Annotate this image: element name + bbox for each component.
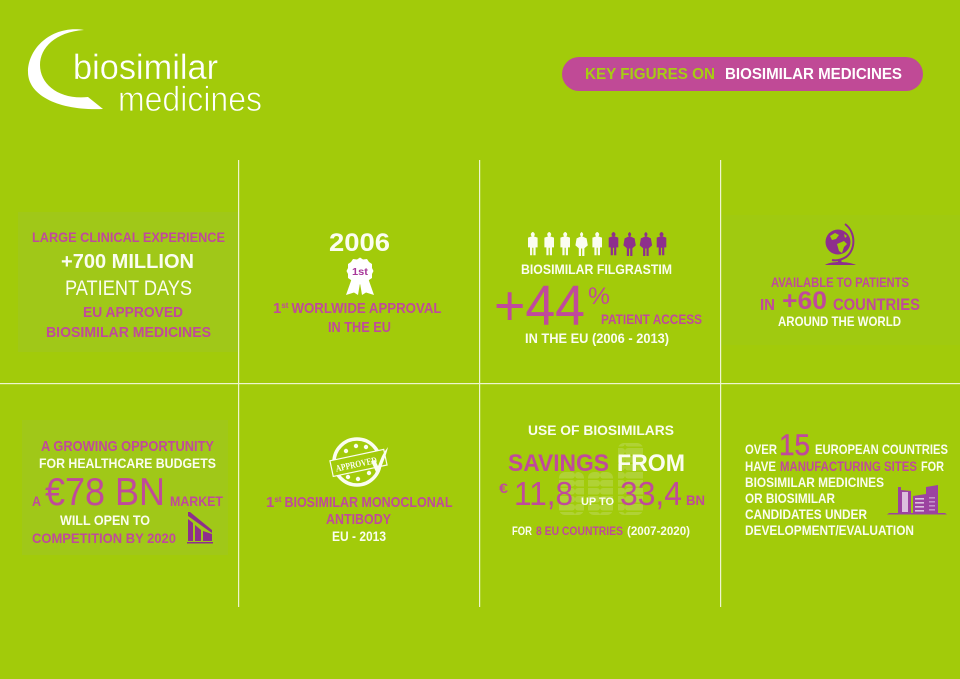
text: EU approved biosimilar medicines	[46, 304, 211, 341]
figure: 11,8 up to 33,4 bn: UP TO	[581, 496, 614, 508]
panel: savings from use of biosimilars	[499, 422, 705, 538]
figure: +44%: +44	[494, 274, 585, 338]
panel: first biosimilar monoclonal antibody	[266, 439, 452, 544]
text: over 15 european countries	[745, 429, 948, 462]
text: will open to competition by 2020	[32, 512, 176, 546]
figure: 11,8 up to 33,4 bn: BN	[686, 492, 705, 508]
icon: approved stamp: APPROVED	[335, 456, 378, 475]
text: biosimilar medicines or candidates	[745, 474, 914, 538]
title pill: key figures on biosimilar medicines: BIOSIMILAR MEDICINES	[725, 66, 902, 83]
figure: a 78 bn market: MARKET	[170, 493, 223, 509]
figure: 11,8 up to 33,4 bn: 11,8	[514, 475, 573, 512]
text: will open to competition by 2020: WILL OPEN TO	[60, 512, 150, 528]
text: for 8 EU countries 2007-2020: FOR	[512, 524, 532, 538]
text: large clinical experience: LARGE CLINICAL EXPERIENCE	[32, 229, 225, 245]
text: will open to competition by 2020: COMPETITION BY 2020	[32, 530, 176, 546]
text: biosimilar medicines or candidates: BIOSIMILAR MEDICINES	[745, 474, 884, 490]
text: for 8 EU countries 2007-2020: 8 EU COUNTRIES	[536, 524, 623, 538]
panel: growing opportunity	[22, 420, 228, 555]
title pill: key figures on biosimilar medicines: KEY FIGURES ON	[585, 66, 715, 83]
text: have manufacturing sites for: FOR	[921, 458, 944, 474]
figure: 11,8 up to 33,4 bn: 33,4	[620, 475, 682, 512]
figure: +44%: %	[588, 283, 610, 310]
logo: biosimilar medicines	[28, 29, 262, 119]
heading: savings from	[508, 450, 685, 477]
text: first worldwide approval in the EU: st	[281, 301, 289, 310]
icon: globe	[825, 224, 856, 265]
panel: large clinical experience	[18, 212, 238, 352]
logo wordmark biosimilar: biosimilar	[73, 48, 218, 87]
figure: a 78 bn market	[32, 471, 223, 514]
figure: in +60 countries: +60	[782, 287, 827, 315]
panel: 2006 first approval	[273, 229, 441, 336]
text: first worldwide approval in the EU	[273, 300, 441, 336]
icon: faint coin stacks	[559, 443, 643, 515]
figure: a 78 bn market: €78 BN	[45, 471, 165, 514]
text: for healthcare budgets: FOR HEALTHCARE BUDGETS	[39, 455, 216, 471]
text: have manufacturing sites for: HAVE	[745, 458, 776, 474]
icon: approved stamp	[330, 439, 388, 485]
logo crescent	[28, 29, 103, 109]
heading: biosimilar filgrastim: BIOSIMILAR FILGRASTIM	[521, 261, 672, 277]
text: biosimilar medicines or candidates: CANDIDATES UNDER	[745, 506, 867, 522]
text: biosimilar medicines or candidates: DEVELOPMENT/EVALUATION	[745, 522, 914, 538]
text: first worldwide approval in the EU: IN THE EU	[328, 319, 391, 336]
panel: available in over 60 countries	[722, 215, 960, 345]
text: biosimilar medicines or candidates: OR BIOSIMILAR	[745, 490, 835, 506]
heading: a growing opportunity: A GROWING OPPORTUNITY	[41, 438, 214, 455]
logo wordmark medicines: medicines	[118, 80, 262, 119]
text: in the EU 2006-2013: IN THE EU (2006 - 2013)	[525, 330, 669, 346]
text: patient access: PATIENT ACCESS	[601, 311, 702, 327]
figure: in +60 countries: IN	[760, 297, 775, 314]
text: first biosimilar monoclonal antibody: BIOSIMILAR MONOCLONAL	[284, 494, 452, 511]
icon: row of nine people	[528, 232, 666, 256]
text: patient days: PATIENT DAYS	[65, 277, 192, 300]
heading: use of biosimilars: USE OF BIOSIMILARS	[528, 422, 674, 438]
figure: 2006: 2006	[329, 229, 390, 257]
text: for 8 EU countries 2007-2020: (2007-2020)	[627, 524, 690, 538]
figure: in +60 countries: COUNTRIES	[833, 295, 920, 314]
text: EU - 2013: EU - 2013	[332, 528, 386, 544]
text: over 15 european countries: 15	[779, 429, 810, 462]
icon: first place rosette	[346, 258, 374, 295]
panel: biosimilar filgrastim patient access	[494, 232, 702, 346]
icon: falling bar chart	[187, 512, 213, 544]
text: around the world: AROUND THE WORLD	[778, 313, 901, 329]
text: EU approved biosimilar medicines: EU APPROVED	[83, 304, 183, 321]
text: have manufacturing sites for: MANUFACTURING SITES	[780, 458, 917, 474]
heading: savings from: FROM	[617, 450, 685, 477]
heading: savings from: SAVINGS	[508, 450, 609, 477]
figure: in +60 countries	[760, 287, 920, 315]
text: first biosimilar monoclonal antibody: st	[274, 495, 282, 504]
icon: first place rosette: 1st	[352, 266, 369, 278]
text: first biosimilar monoclonal antibody: ANTIBODY	[326, 511, 391, 528]
text: first biosimilar monoclonal antibody	[266, 494, 452, 528]
text: for 8 EU countries 2007-2020	[512, 524, 690, 538]
figure: a 78 bn market: A	[32, 493, 41, 509]
text: first worldwide approval in the EU: 1	[273, 300, 281, 317]
figure: +700 million: +700 MILLION	[61, 251, 194, 273]
text: EU approved biosimilar medicines: BIOSIMILAR MEDICINES	[46, 324, 211, 341]
text: first worldwide approval in the EU: WORLWIDE APPROVAL	[291, 300, 441, 317]
panel: manufacturing sites	[745, 429, 948, 538]
title pill: key figures on biosimilar medicines	[562, 57, 923, 91]
icon: factory buildings	[887, 485, 947, 514]
figure: 11,8 up to 33,4 bn: €	[499, 480, 508, 496]
text: first biosimilar monoclonal antibody: 1	[266, 494, 274, 511]
figure: 11,8 up to 33,4 bn	[499, 475, 705, 512]
text: over 15 european countries: OVER	[745, 441, 777, 457]
text: available to patients: AVAILABLE TO PATIENTS	[771, 274, 909, 290]
